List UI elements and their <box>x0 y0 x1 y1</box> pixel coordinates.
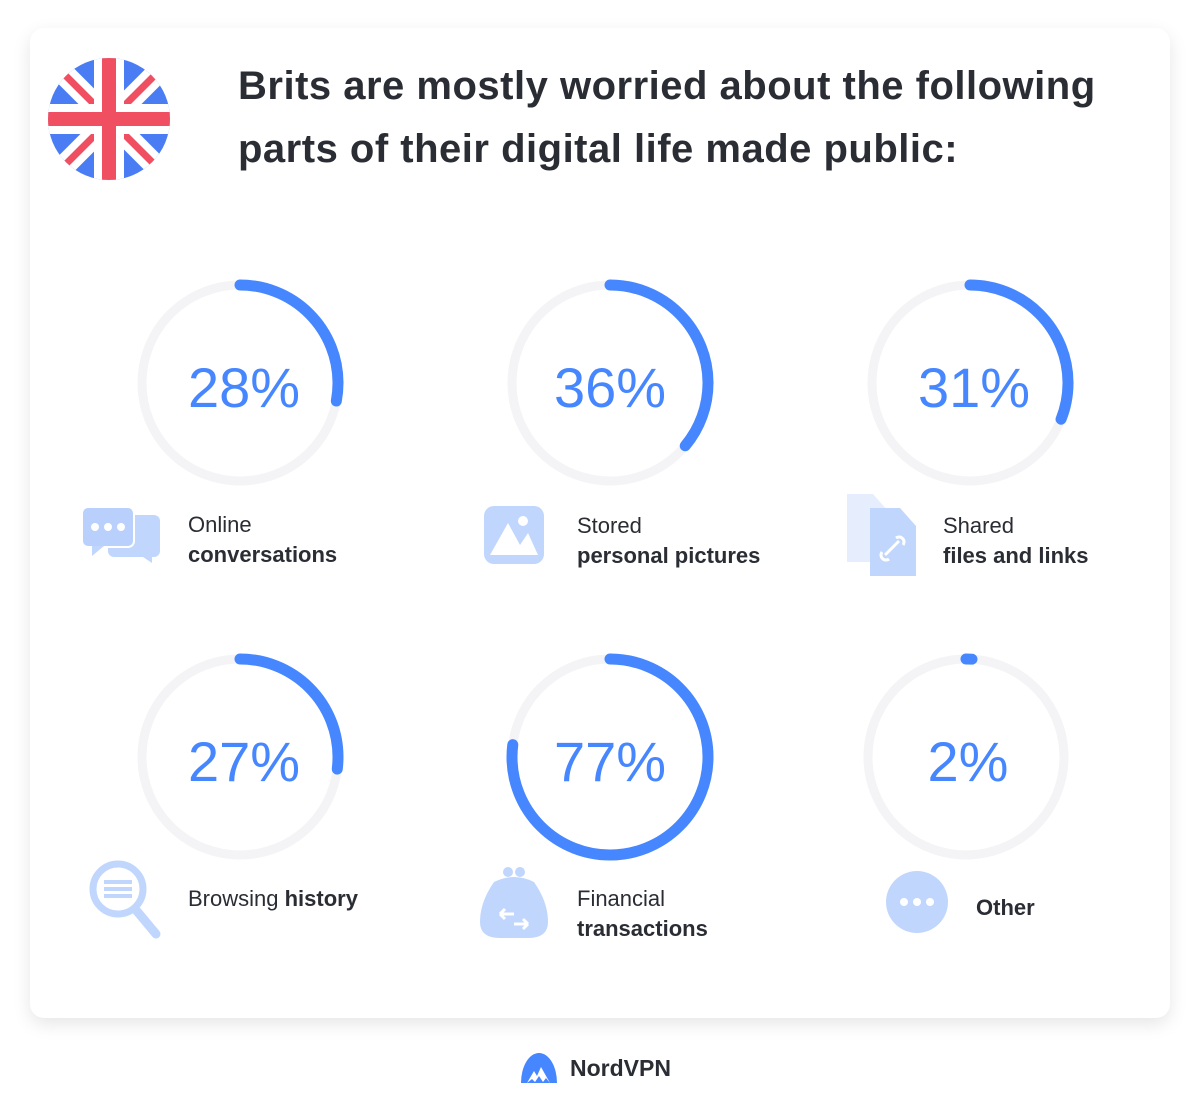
icon: files and links <box>847 494 916 576</box>
label: financial transactions: transactions <box>577 916 708 941</box>
logo: NordVPN: NordVPN <box>570 1055 671 1081</box>
title: Brits are mostly worried about the following <box>238 64 1096 108</box>
icon: magnifier <box>93 864 156 934</box>
chart: 2%: 2% <box>928 730 1008 793</box>
chart: 31% <box>872 285 1068 481</box>
logo: NordVPN <box>521 1053 671 1083</box>
chart: 27% <box>142 659 338 855</box>
label: other: Other <box>976 895 1035 920</box>
label: shared files and links: Shared <box>943 513 1014 538</box>
chart: 28%: 28% <box>188 356 300 419</box>
icon: other dots <box>886 871 948 933</box>
chart: 36% <box>512 285 708 481</box>
label: shared files and links: files and links <box>943 543 1088 568</box>
label: stored personal pictures: personal pictures <box>577 543 760 568</box>
title <box>238 64 1096 171</box>
icon: picture <box>484 506 544 564</box>
chart: 77%: 77% <box>554 730 666 793</box>
label: shared files and links <box>943 513 1088 568</box>
label: online conversations: Online <box>188 512 252 537</box>
chart: 36%: 36% <box>554 356 666 419</box>
title: parts of their digital life made public: <box>238 127 958 171</box>
chart: 28% <box>142 285 338 481</box>
label: online conversations <box>188 512 337 567</box>
label: financial transactions <box>577 886 708 941</box>
icon: chat bubbles <box>82 507 160 563</box>
label: online conversations: conversations <box>188 542 337 567</box>
label: stored personal pictures <box>577 513 760 568</box>
label: browsing history: Browsing history <box>188 886 359 911</box>
label: financial transactions: Financial <box>577 886 665 911</box>
label: stored personal pictures: Stored <box>577 513 642 538</box>
icon: UK flag <box>48 58 170 180</box>
chart: 2% <box>868 659 1064 855</box>
icon: purse <box>480 867 548 938</box>
chart: 77% <box>512 659 708 855</box>
chart: 27%: 27% <box>188 730 300 793</box>
chart: 31%: 31% <box>918 356 1030 419</box>
